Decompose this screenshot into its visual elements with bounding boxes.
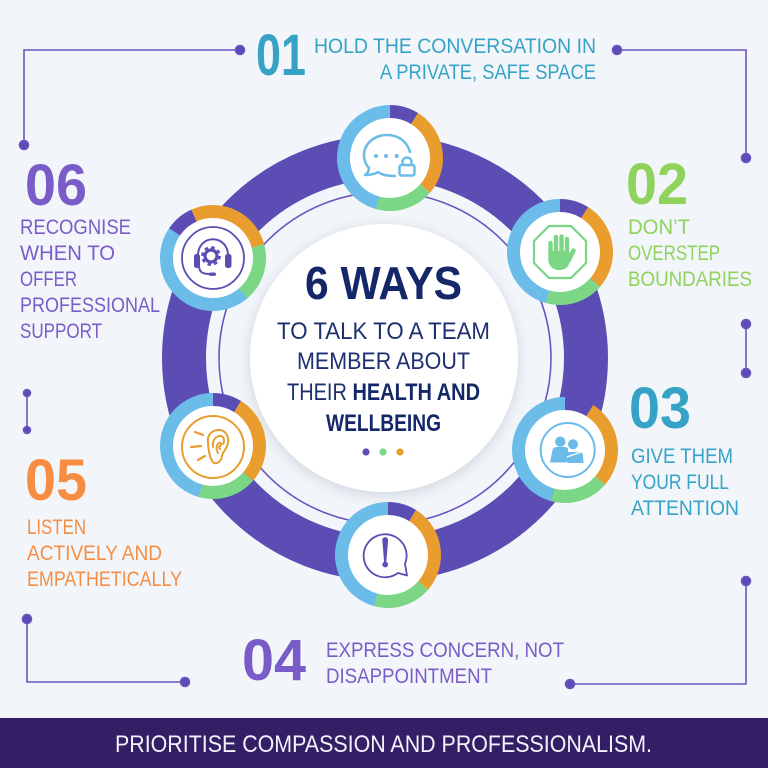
centre subtitle: THEIR HEALTH AND (287, 379, 480, 406)
node 1: private conversation (324, 92, 456, 224)
node 2: stop hand (494, 186, 626, 318)
step 06 text: OFFER (20, 267, 77, 291)
step 06 text: WHEN TO (20, 241, 115, 265)
step 05 text: EMPATHETICALLY (27, 567, 182, 591)
node 4: concern bubble (322, 489, 454, 621)
connector: left (24, 390, 30, 434)
step 05 text: ACTIVELY AND (27, 541, 162, 565)
step 02 text: BOUNDARIES (628, 267, 752, 291)
centre panel (250, 224, 518, 492)
step 02 text: DON’T (628, 215, 690, 239)
step 01 text (256, 23, 596, 88)
step 02 text: 02 (626, 152, 688, 217)
step 03 text (629, 376, 739, 520)
icon: stop sign hand (534, 226, 586, 278)
centre dots (362, 448, 404, 456)
purple ring (184, 157, 586, 559)
step 06 text (20, 153, 160, 343)
node 3: supportive pair (499, 384, 631, 516)
icon: ear with sound lines (182, 416, 244, 478)
step 05 text (25, 448, 182, 591)
step 04 text (242, 628, 564, 693)
centre title: 6 WAYS (305, 257, 462, 309)
connector: right (742, 320, 750, 378)
step 06 text: PROFESSIONAL (20, 293, 160, 317)
step 03 text: YOUR FULL (631, 470, 729, 494)
step 02 text: OVERSTEP (628, 241, 720, 265)
step 01 text: A PRIVATE, SAFE SPACE (380, 60, 596, 84)
step 06 text: 06 (25, 153, 87, 218)
footer banner (0, 718, 768, 768)
step 03 text: GIVE THEM (631, 444, 733, 468)
step 05 text: 05 (25, 448, 87, 513)
step 05 text: LISTEN (27, 515, 86, 539)
thin inner ring (219, 192, 551, 524)
step 06 text: RECOGNISE (20, 215, 131, 239)
step 04 text: DISAPPOINTMENT (326, 664, 492, 688)
connector: top right (612, 46, 750, 162)
centre subtitle: WELLBEING (326, 410, 441, 437)
centre subtitle: MEMBER ABOUT (297, 348, 470, 375)
icon: two people embracing (541, 423, 595, 477)
centre subtitle: TO TALK TO A TEAM (277, 318, 490, 345)
connector: bottom right (566, 576, 750, 688)
step 01 text: HOLD THE CONVERSATION IN (314, 34, 596, 58)
node 5: listening ear (147, 380, 279, 512)
step 04 text: EXPRESS CONCERN, NOT (326, 638, 564, 662)
icon: headset with gear (182, 227, 244, 289)
step 06 text: SUPPORT (20, 319, 102, 343)
connector: top left (20, 46, 244, 150)
footer banner: PRIORITISE COMPASSION AND PROFESSIONALISM. (115, 731, 652, 758)
node 6: support headset (122, 167, 304, 349)
icon: speech bubble with lock (364, 135, 414, 176)
step 03 text: ATTENTION (631, 496, 739, 520)
connector: bottom left (22, 614, 190, 686)
step 03 text: 03 (629, 376, 691, 441)
step 02 text (626, 152, 752, 291)
centre subtitle (277, 318, 490, 437)
icon: exclamation speech bubble (364, 534, 407, 577)
step 01 text: 01 (256, 23, 306, 88)
step 04 text: 04 (242, 628, 306, 693)
